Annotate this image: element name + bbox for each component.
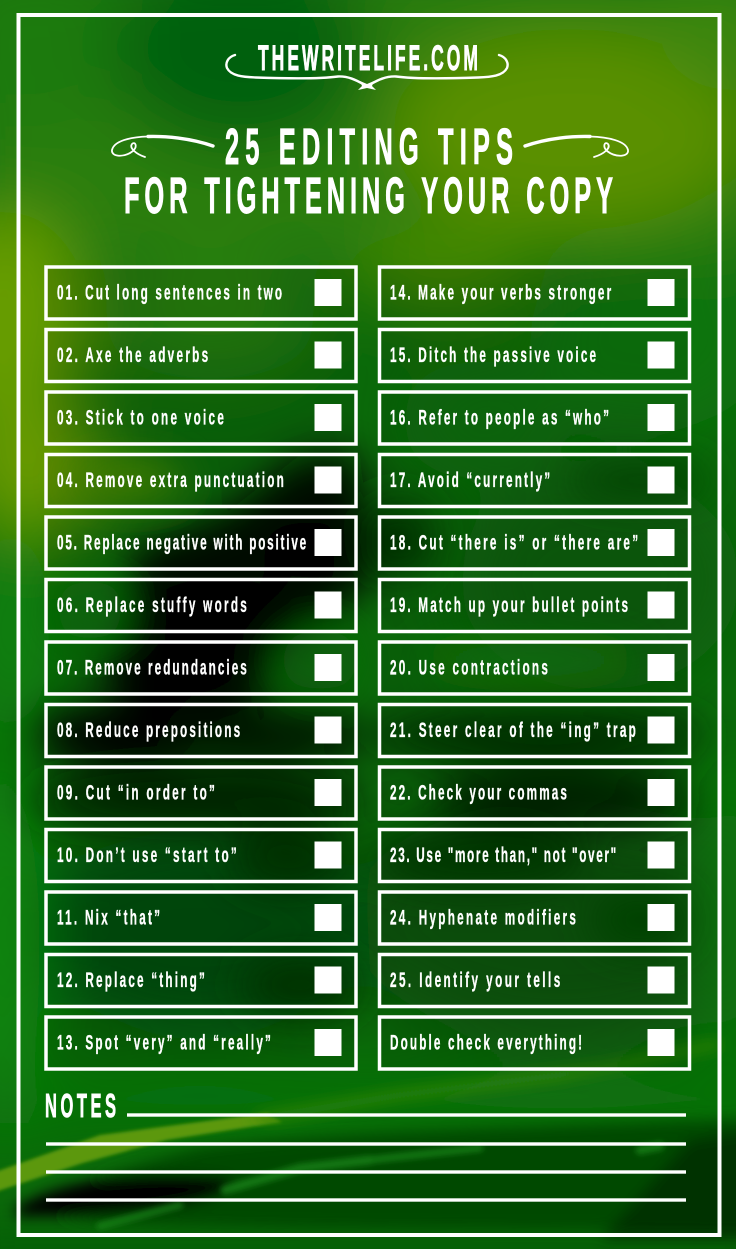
tip 21 — [380, 704, 690, 756]
background: faint continuation of streak — [250, 1040, 720, 1122]
tip 20 — [380, 642, 690, 694]
tip 14: 14. Make your verbs stronger — [390, 281, 611, 304]
background: olive streak — [0, 1113, 282, 1192]
tip 15 — [380, 330, 690, 382]
tip 13 — [46, 1017, 356, 1069]
tip 25: 25. Identify your tells — [390, 968, 560, 992]
tip 16: 16. Refer to people as “who” — [390, 406, 609, 429]
tip 04 — [46, 454, 356, 506]
tip 09 — [46, 767, 356, 819]
title — [112, 118, 628, 224]
tip 01: 01. Cut long sentences in two — [57, 281, 282, 304]
tip 18: 18. Cut “there is” or “there are” — [390, 531, 638, 554]
tip 12: 12. Replace “thing” — [57, 968, 205, 992]
tip 05 — [46, 517, 356, 569]
tip 10: 10. Don’t use “start to” — [57, 843, 237, 867]
tip 11 — [46, 892, 356, 944]
tip 02: 02. Axe the adverbs — [57, 343, 208, 367]
final tip: double check — [380, 1017, 690, 1069]
tip 20: 20. Use contractions — [390, 656, 548, 679]
header: site name — [226, 38, 508, 90]
tip 04: 04. Remove extra punctuation — [57, 468, 284, 492]
tip 17 — [380, 454, 690, 506]
tip 19 — [380, 580, 690, 632]
tip 09: 09. Cut “in order to” — [57, 781, 215, 804]
tip 16 — [380, 392, 690, 444]
tip 08: 08. Reduce prepositions — [57, 718, 240, 742]
tip 17: 17. Avoid “currently” — [390, 468, 550, 492]
tip 24: 24. Hyphenate modifiers — [390, 906, 576, 929]
notes section: NOTES — [45, 1087, 116, 1125]
tip 23: 23. Use "more than," not "over" — [390, 843, 616, 867]
title: 25 EDITING TIPS — [225, 118, 513, 175]
tip 01 — [46, 267, 356, 319]
tip 03: 03. Stick to one voice — [57, 406, 224, 429]
ornament: left flourish — [112, 136, 213, 157]
tip 02 — [46, 330, 356, 382]
ornament: bracket under site name — [226, 55, 508, 90]
header: site name: THEWRITELIFE.COM — [258, 38, 478, 78]
tip 05: 05. Replace negative with positive — [57, 531, 306, 554]
tip 21: 21. Steer clear of the “ing” trap — [390, 718, 636, 742]
tip 11: 11. Nix “that” — [57, 906, 160, 929]
tip 24 — [380, 892, 690, 944]
ornament: right flourish — [525, 136, 628, 157]
tip 08 — [46, 704, 356, 756]
tip 06 — [46, 580, 356, 632]
tip 14 — [380, 267, 690, 319]
final tip: double check: Double check everything! — [390, 1031, 582, 1054]
tip 18 — [380, 517, 690, 569]
tip 07 — [46, 642, 356, 694]
tip 23 — [380, 830, 690, 882]
tip 07: 07. Remove redundancies — [57, 656, 247, 679]
tip 19: 19. Match up your bullet points — [390, 593, 628, 617]
tip 12 — [46, 954, 356, 1006]
tip 15: 15. Ditch the passive voice — [390, 343, 596, 367]
tip 10 — [46, 830, 356, 882]
tip 22 — [380, 767, 690, 819]
tip 22: 22. Check your commas — [390, 781, 567, 804]
notes section — [45, 1087, 686, 1202]
tip 06: 06. Replace stuffy words — [57, 593, 247, 617]
tip 13: 13. Spot “very” and “really” — [57, 1031, 271, 1054]
tip 03 — [46, 392, 356, 444]
title: FOR TIGHTENING YOUR COPY — [124, 167, 613, 224]
tip 25 — [380, 954, 690, 1006]
